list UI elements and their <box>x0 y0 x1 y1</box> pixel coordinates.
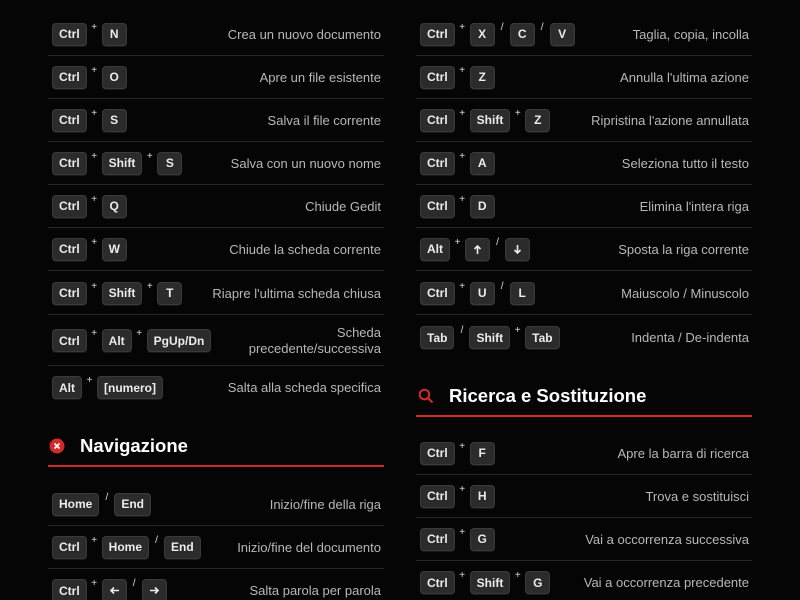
row: next <box>416 518 752 561</box>
panel: editing <box>416 22 752 350</box>
row: word jump: Ctrl <box>59 584 80 598</box>
row: reopen <box>48 272 384 315</box>
row: doc start/end: Ctrl <box>59 540 80 554</box>
row: tab switch: + <box>91 328 97 339</box>
row: indent: Tab <box>532 330 553 344</box>
row: replace: + <box>459 484 465 494</box>
panel: search <box>416 440 752 595</box>
row: reopen: Ctrl <box>59 286 80 300</box>
row: close tab: Ctrl <box>59 242 80 256</box>
row: case: U <box>478 286 486 300</box>
heading: Navigazione: Navigazione <box>80 435 188 456</box>
row: open: Ctrl <box>59 70 80 84</box>
row: doc start/end: / <box>155 534 158 546</box>
row: delete line: Elimina l'intera riga <box>640 198 749 214</box>
row: redo: Z <box>534 113 542 127</box>
row: case: + <box>459 280 465 292</box>
row: open <box>48 56 384 99</box>
row: tab switch: precedente/successiva <box>249 340 381 356</box>
row: tab number: Salta alla scheda specifica <box>228 380 381 395</box>
row: move line: + <box>455 236 460 248</box>
row: quit: Q <box>110 199 119 213</box>
row: close tab: + <box>91 236 97 248</box>
row: doc start/end: Home <box>109 540 142 554</box>
row: delete line: Ctrl <box>427 199 448 213</box>
row: delete line: D <box>478 199 486 213</box>
row: select all: A <box>478 156 486 170</box>
row: cut copy paste: V <box>558 27 566 41</box>
row: open: Apre un file esistente <box>260 70 381 84</box>
row: redo: + <box>515 108 521 118</box>
row: reopen: + <box>147 280 153 292</box>
row: save: + <box>91 108 97 118</box>
row: move line <box>416 228 752 271</box>
row: save as: S <box>166 156 174 170</box>
row: home/end: Home <box>59 497 92 511</box>
row: indent: Shift <box>476 330 503 344</box>
row: move line: Alt <box>427 242 443 256</box>
row: quit: Chiude Gedit <box>305 198 381 214</box>
row: doc start/end <box>48 526 384 569</box>
row: find: + <box>459 440 465 452</box>
row: save: S <box>110 113 118 127</box>
row: indent: Indenta / De-indenta <box>631 330 749 345</box>
row: indent: Tab <box>427 330 447 344</box>
row: find <box>416 432 752 475</box>
row: cut copy paste: Ctrl <box>427 27 448 41</box>
row: previous: Vai a occorrenza precedente <box>584 575 749 590</box>
row: save as: Ctrl <box>59 156 80 170</box>
row: word jump <box>52 578 381 600</box>
row: save: Salva il file corrente <box>268 112 381 128</box>
row: tab number <box>52 375 381 400</box>
row: previous: Ctrl <box>427 576 448 590</box>
row: cut copy paste: X <box>478 27 486 41</box>
row: tab switch <box>48 316 384 366</box>
row: tab switch: Alt <box>109 334 125 348</box>
row: cut copy paste: C <box>518 27 526 41</box>
row: doc start/end: Inizio/fine del documento <box>237 540 381 554</box>
row: case <box>416 272 752 315</box>
row: undo: Z <box>478 70 486 84</box>
row: redo <box>416 99 752 142</box>
row: save <box>48 99 384 142</box>
row: quit: Ctrl <box>59 199 80 213</box>
row: delete line: + <box>459 194 465 204</box>
row: close tab: Chiude la scheda corrente <box>229 242 381 256</box>
row: close tab: W <box>109 242 120 256</box>
row: save as <box>48 142 384 185</box>
row: next: + <box>459 526 465 538</box>
heading: Ricerca e Sostituzione: Ricerca e Sostituzione <box>449 385 646 406</box>
row: move line: Sposta la riga corrente <box>618 242 749 256</box>
row: tab number: Alt <box>59 380 75 394</box>
row: word jump: / <box>133 578 136 589</box>
row: home/end <box>48 483 384 526</box>
row: case: Ctrl <box>427 286 448 300</box>
row: next: G <box>478 532 487 546</box>
row: quit: + <box>91 194 97 204</box>
row: indent: + <box>515 325 521 336</box>
row: undo: + <box>459 64 465 76</box>
heading: Ricerca e Sostituzione <box>416 377 752 417</box>
row: home/end: Inizio/fine della riga <box>270 496 381 512</box>
row: indent <box>420 325 749 350</box>
row: tab number: [numero] <box>104 380 156 394</box>
row: select all: Ctrl <box>427 156 448 170</box>
row: move line: / <box>496 236 499 248</box>
row: find: Apre la barra di ricerca <box>618 446 749 460</box>
row: redo: Shift <box>477 113 503 127</box>
row: select all: Seleziona tutto il testo <box>622 156 749 170</box>
heading: Navigazione <box>48 427 384 467</box>
row: undo: Annulla l'ultima azione <box>620 70 749 84</box>
row: case: L <box>518 286 526 300</box>
row: select all <box>416 142 752 185</box>
row: home/end: End <box>121 497 144 511</box>
row: previous: + <box>515 570 521 581</box>
panel: file shortcuts <box>48 22 384 400</box>
row: redo: Ripristina l'azione annullata <box>591 112 749 128</box>
row: reopen: + <box>91 280 97 292</box>
row: save as: + <box>91 150 97 162</box>
row: previous: G <box>533 576 543 590</box>
row: new: Ctrl <box>59 27 80 41</box>
row: previous: Shift <box>477 576 503 590</box>
row: close tab <box>48 228 384 271</box>
row: open: O <box>110 70 119 84</box>
row: tab switch: Ctrl <box>59 334 80 348</box>
row: save: Ctrl <box>59 113 80 127</box>
row: word jump: + <box>91 578 97 589</box>
row: indent: / <box>461 325 463 336</box>
row: next: Ctrl <box>427 532 448 546</box>
row: cut copy paste <box>416 13 752 56</box>
row: tab switch: Scheda <box>337 324 381 340</box>
row: cut copy paste: / <box>541 22 544 32</box>
row: doc start/end: End <box>171 540 194 554</box>
row: redo: + <box>459 108 465 118</box>
panel: navigation <box>48 492 384 600</box>
row: delete line <box>416 185 752 228</box>
row: tab switch: + <box>136 328 142 339</box>
row: new: + <box>91 22 97 32</box>
row: save as: Salva con un nuovo nome <box>231 156 381 170</box>
row: new <box>48 13 384 56</box>
row: find: Ctrl <box>427 446 448 460</box>
row: new: Crea un nuovo documento <box>228 26 381 42</box>
row: home/end: / <box>105 492 108 502</box>
row: previous: + <box>459 570 465 581</box>
row: new: N <box>110 27 118 41</box>
row: select all: + <box>459 150 465 162</box>
row: previous <box>420 570 749 595</box>
row: open: + <box>91 64 97 76</box>
row: reopen: Shift <box>109 286 135 300</box>
row: replace: Ctrl <box>427 489 448 503</box>
row: reopen: Riapre l'ultima scheda chiusa <box>212 286 381 300</box>
row: quit <box>48 185 384 228</box>
row: next: Vai a occorrenza successiva <box>585 532 749 546</box>
row: tab switch: PgUp/Dn <box>154 334 204 348</box>
row: doc start/end: + <box>91 534 97 546</box>
row: case: Maiuscolo / Minuscolo <box>621 286 749 300</box>
row: undo: Ctrl <box>427 70 448 84</box>
row: replace: Trova e sostituisci <box>645 488 749 504</box>
row: case: / <box>501 280 504 292</box>
row: tab number: + <box>87 375 92 386</box>
row: cut copy paste: Taglia, copia, incolla <box>633 26 749 42</box>
row: cut copy paste: + <box>459 22 465 32</box>
row: word jump: Salta parola per parola <box>249 583 381 598</box>
row: redo: Ctrl <box>427 113 448 127</box>
row: replace: H <box>478 489 486 503</box>
row: save as: + <box>147 150 153 162</box>
row: find: F <box>478 446 486 460</box>
row: replace <box>416 475 752 518</box>
row: undo <box>416 56 752 99</box>
row: save as: Shift <box>109 156 135 170</box>
row: cut copy paste: / <box>501 22 504 32</box>
row: reopen: T <box>166 286 174 300</box>
